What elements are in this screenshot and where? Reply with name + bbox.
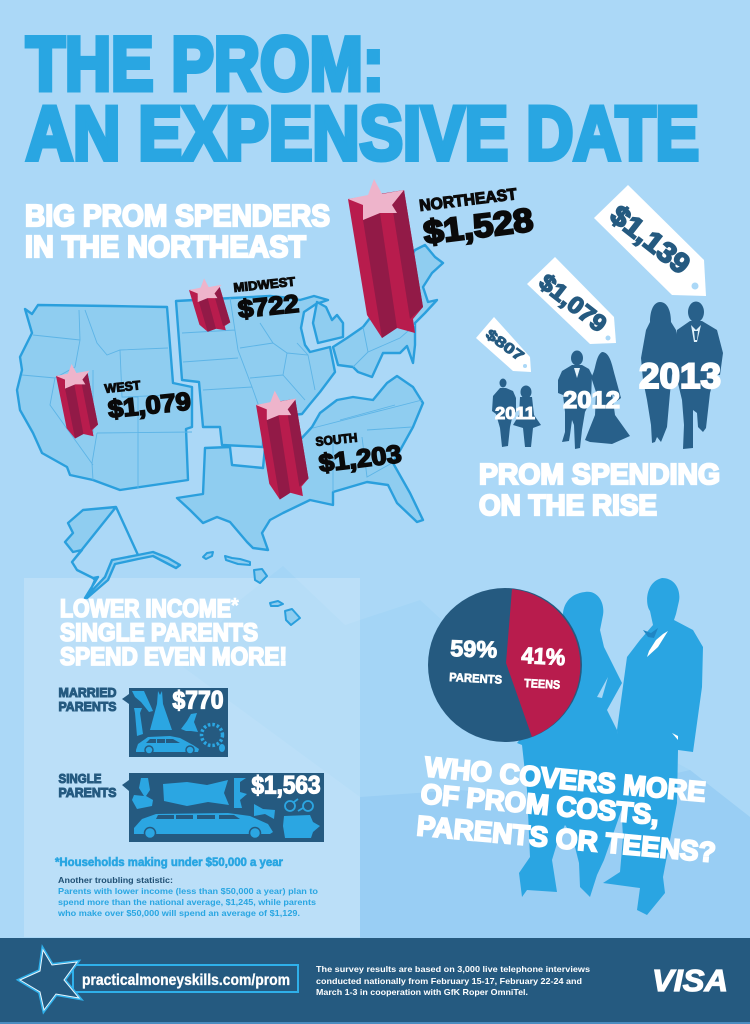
label: northeast amount [418,186,535,251]
arm gap [597,677,608,698]
text block: another troubling statistic: who make over $50,000 will spend an average of $1,129. [57,909,300,918]
survey note [316,964,590,997]
label: northeast amount: NORTHEAST [418,186,518,215]
map: alaska [65,507,180,598]
label: midwest amount [233,275,300,324]
price tag: 2011: $807 [482,327,527,365]
heading: who covers more: WHO COVERS MORE [423,751,707,808]
icon: tie [134,708,143,736]
url box [73,965,298,992]
figure: man [603,578,703,915]
url text: practicalmoneyskills.com/prom [82,972,290,989]
label: midwest amount: MIDWEST [233,275,296,295]
pie chart: parents and teens: 41% [521,642,566,670]
icon: necklace [234,778,247,808]
icon: long dress [163,780,229,806]
label: married parents [58,685,117,714]
pie chart: parents and teens [428,588,582,742]
icon: car [136,736,199,754]
survey note: March 1-3 in cooperation with GfK Roper OmniTel. [316,987,528,997]
pie chart: parents and teens: TEENS [524,676,561,692]
silhouette: 2011 couple [492,378,541,447]
heading: who covers more: PARENTS OR TEENS? [415,810,717,868]
column: northeast [348,179,423,338]
label: west amount: WEST [104,378,141,396]
label: midwest amount: $722 [237,290,300,324]
label: married parents: PARENTS [58,699,117,714]
couple 2011 with price tag [476,317,541,447]
icon: limousine [134,813,273,838]
heading: big prom spenders: IN THE NORTHEAST [25,229,306,264]
amount: 770: $770 [172,686,224,714]
label: south amount: $1,203 [317,440,403,478]
label: west amount: $1,079 [107,387,192,424]
icon: shoes [132,778,153,809]
label: married parents: MARRIED [58,685,116,700]
icon: necklace [202,724,222,746]
map: hawaii [203,552,300,625]
shirt detail [647,631,668,657]
icon: star [20,950,79,1010]
silhouette: 2013 couple [641,302,723,449]
column: south [256,391,308,500]
price tag: 2012: $1,079 [534,269,612,337]
pie chart: parents and teens: 59% [450,635,498,663]
map region: west [17,305,192,490]
text block: another troubling statistic: Another troubling statistic: [58,876,173,885]
label: single parents [58,771,117,800]
icon: pendant [219,744,225,752]
map region: south [177,376,423,550]
heading: lower income: * [231,595,239,617]
heading: big prom spenders: BIG PROM SPENDERS [25,198,330,233]
column: west [56,364,98,439]
pie chart: parents and teens: PARENTS [449,670,503,687]
label: single parents: SINGLE [58,771,102,786]
survey note: conducted nationally from February 15-17, February 22-24 and [316,976,582,986]
amount: 1,563: $1,563 [252,772,320,800]
heading: who covers more [415,751,717,868]
label: south amount: SOUTH [315,431,358,449]
price tag: 2013 [594,185,706,296]
text block: another troubling statistic [57,876,318,918]
label: single parents: PARENTS [58,785,117,800]
label: northeast amount: $1,528 [421,201,535,251]
heading: prom spending on the rise: PROM SPENDING [479,459,720,491]
silhouette: 2012 couple [558,350,630,449]
heading: prom spending on the rise [479,459,720,522]
box: married parents spending [122,686,228,757]
heading: lower income: LOWER INCOME [60,595,231,623]
icon: bow tie [181,713,198,732]
logo: visa: VISA [652,963,728,998]
box: single parents spending [122,772,324,842]
couple 2012 with price tag [527,257,630,449]
heading: lower income: SPEND EVEN MORE! [60,643,287,671]
year label: 2012: 2012 [563,387,620,414]
map region: northeast [333,245,443,377]
icon: shoe [132,691,153,712]
survey note: The survey results are based on 3,000 live telephone interviews [316,964,590,974]
year label: 2011: 2011 [495,403,535,423]
heading: who covers more: OF PROM COSTS, [419,778,660,831]
silhouette: prom couple [517,578,703,915]
text block: another troubling statistic: spend more than the national average, $1,245, while parents [58,898,316,907]
figure: woman [517,592,625,897]
heading: big prom spenders [25,198,330,264]
year label: 2013: 2013 [639,357,721,396]
price tag: 2013: $1,139 [605,199,696,280]
icon: bow tie [254,804,275,819]
heading: lower income: SINGLE PARENTS [60,619,258,647]
title: THE PROM: [26,22,384,107]
note: households: *Households making under $50,000 a year [55,855,283,869]
title [26,22,699,176]
icon: purse [283,815,320,838]
column: midwest [189,278,230,332]
heading: lower income [60,595,287,671]
map of the United States [17,245,443,625]
map region: midwest [176,296,343,447]
panel: lower income background [24,578,360,937]
footer band [0,938,750,1024]
text block: another troubling statistic: Parents with lower income (less than $50,000 a year) plan to [58,887,318,896]
heading: prom spending on the rise: ON THE RISE [479,490,657,522]
price tag: 2012 [527,257,616,344]
icon: dress [150,691,172,730]
icon: rings [285,799,313,811]
couple 2013 with price tag [594,185,723,449]
